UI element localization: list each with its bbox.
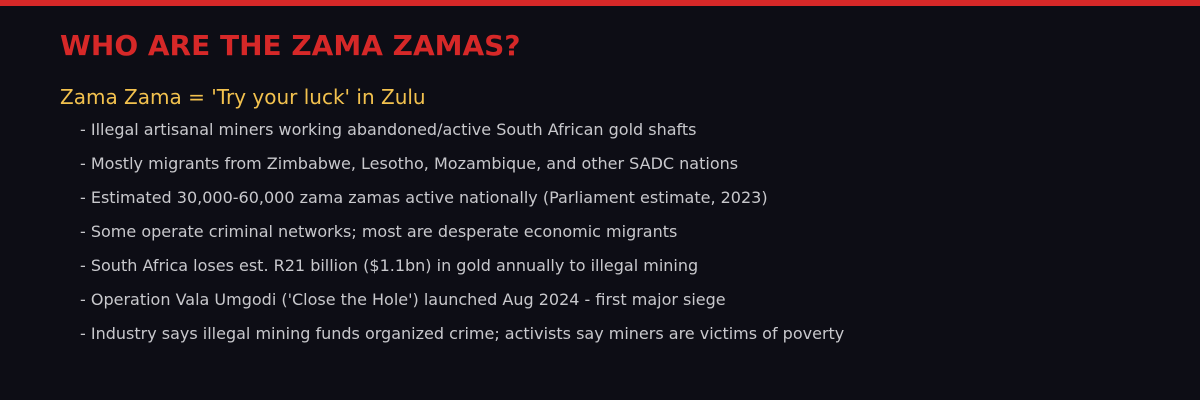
bullet list: - Illegal artisanal miners working abandoned/active South African gold shafts: [80, 120, 697, 139]
bullet list: - Mostly migrants from Zimbabwe, Lesotho, Mozambique, and other SADC nations: [80, 154, 738, 173]
bullet list: - South Africa loses est. R21 billion ($1.1bn) in gold annually to illegal mining: [80, 256, 698, 275]
title: WHO ARE THE ZAMA ZAMAS?: [60, 29, 521, 62]
bullet list: - Some operate criminal networks; most are desperate economic migrants: [80, 222, 677, 241]
subtitle: Zama Zama = 'Try your luck' in Zulu: [60, 85, 426, 109]
bullet list: - Operation Vala Umgodi ('Close the Hole') launched Aug 2024 - first major siege: [80, 290, 726, 309]
bullet list: - Industry says illegal mining funds organized crime; activists say miners are victims of poverty: [80, 324, 844, 343]
bullet list: [80, 120, 844, 343]
top accent bar: [0, 0, 1200, 6]
bullet list: - Estimated 30,000-60,000 zama zamas active nationally (Parliament estimate, 2023): [80, 188, 768, 207]
